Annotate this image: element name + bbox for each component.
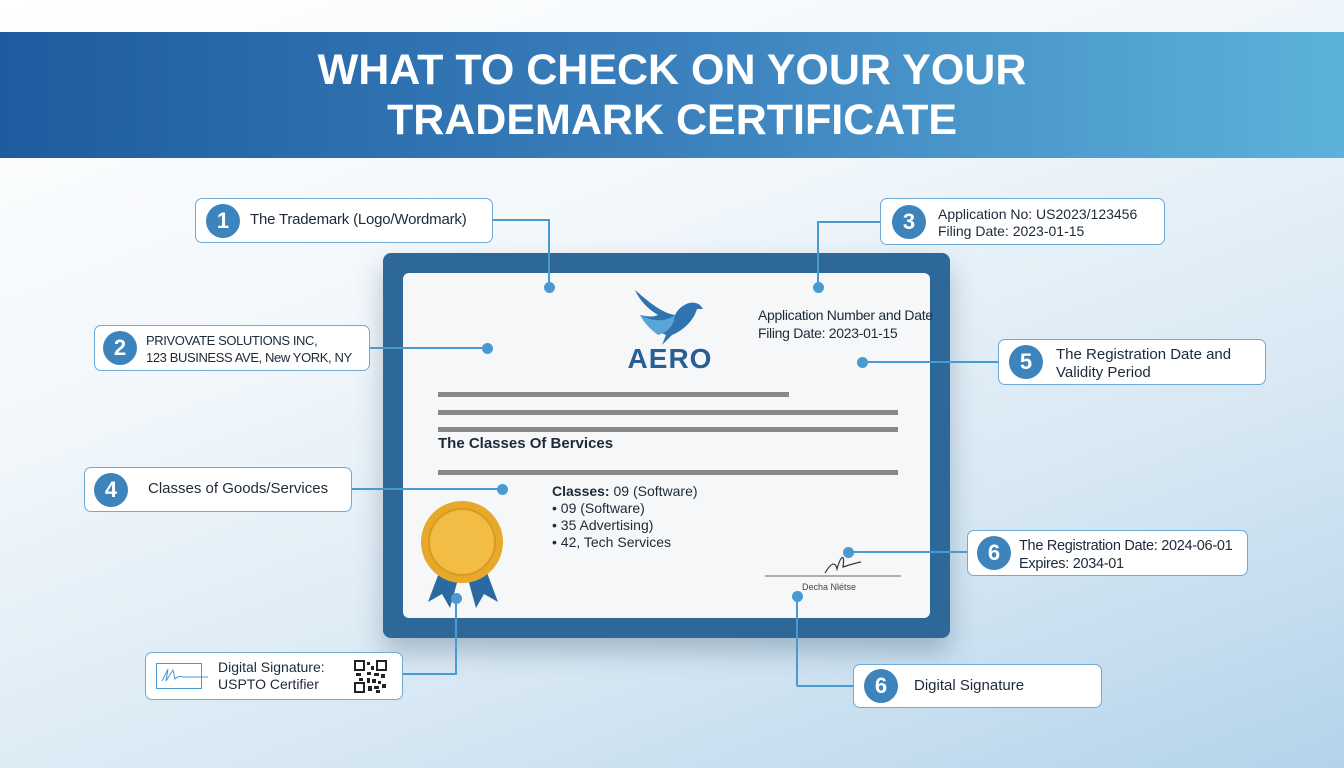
classes list: Classes: 09 (Software) xyxy=(552,483,698,499)
title: TRADEMARK CERTIFICATE xyxy=(387,96,957,144)
callout 1: trademark xyxy=(195,198,493,243)
callout 3: application number xyxy=(880,198,1165,245)
callout 5: registration date: Validity Period xyxy=(1056,364,1151,381)
callout 4: classes: 4 xyxy=(105,477,117,502)
callout 6: registration dates xyxy=(967,530,1248,576)
callout 3: application number: Filing Date: 2023-01-15 xyxy=(938,223,1084,239)
text bars xyxy=(438,392,898,475)
callout: digital signature with QR: USPTO Certifier xyxy=(218,676,319,692)
callout 2: owner: PRIVOVATE SOLUTIONS INC, xyxy=(146,333,317,348)
callout 3: application number: 3 xyxy=(903,209,915,234)
classes heading: The Classes Of Bervices xyxy=(438,435,613,452)
callout 4: classes xyxy=(84,467,352,512)
classes list: • 09 (Software) xyxy=(552,500,645,516)
classes list xyxy=(552,483,698,550)
callout 2: owner: 2 xyxy=(114,335,126,360)
callout 4: classes: Classes of Goods/Services xyxy=(148,480,328,497)
title xyxy=(318,46,1026,144)
seal xyxy=(421,501,503,608)
callout 2: owner xyxy=(94,325,370,371)
callout 6: registration dates: The Registration Date: 2024-06-01 xyxy=(1019,538,1232,554)
callout 6: digital signature: Digital Signature xyxy=(914,677,1024,694)
application number text: Application Number and Date xyxy=(758,307,933,323)
callout 6: digital signature xyxy=(853,664,1102,708)
connectors xyxy=(493,219,549,221)
callout 5: registration date xyxy=(998,339,1266,385)
classes list: • 35 Advertising) xyxy=(552,517,653,533)
callout 5: registration date: 5 xyxy=(1020,349,1032,374)
callout 5: registration date: The Registration Date and xyxy=(1056,346,1231,363)
signature on certificate: Decha Nlétse xyxy=(802,582,856,592)
callout 1: trademark: 1 xyxy=(217,208,229,233)
title: WHAT TO CHECK ON YOUR YOUR xyxy=(318,46,1026,94)
signature on certificate xyxy=(765,556,901,592)
classes list: • 42, Tech Services xyxy=(552,534,671,550)
application number text: Filing Date: 2023-01-15 xyxy=(758,325,897,341)
callout 3: application number: Application No: US2023/123456 xyxy=(938,206,1137,222)
callout: digital signature with QR xyxy=(145,652,403,700)
certificate logo: AERO xyxy=(628,343,712,374)
callout 6: registration dates: 6 xyxy=(988,540,1000,565)
callout 6: registration dates: Expires: 2034-01 xyxy=(1019,556,1124,572)
callout 2: owner: 123 BUSINESS AVE, New YORK, NY xyxy=(146,350,352,365)
callout 1: trademark: The Trademark (Logo/Wordmark) xyxy=(250,211,466,228)
certificate xyxy=(383,253,950,638)
callout: digital signature with QR: Digital Signature: xyxy=(218,659,325,675)
application number text xyxy=(758,307,933,341)
title banner xyxy=(0,32,1344,158)
callout 6: digital signature: 6 xyxy=(875,673,887,698)
certificate logo xyxy=(628,290,712,374)
